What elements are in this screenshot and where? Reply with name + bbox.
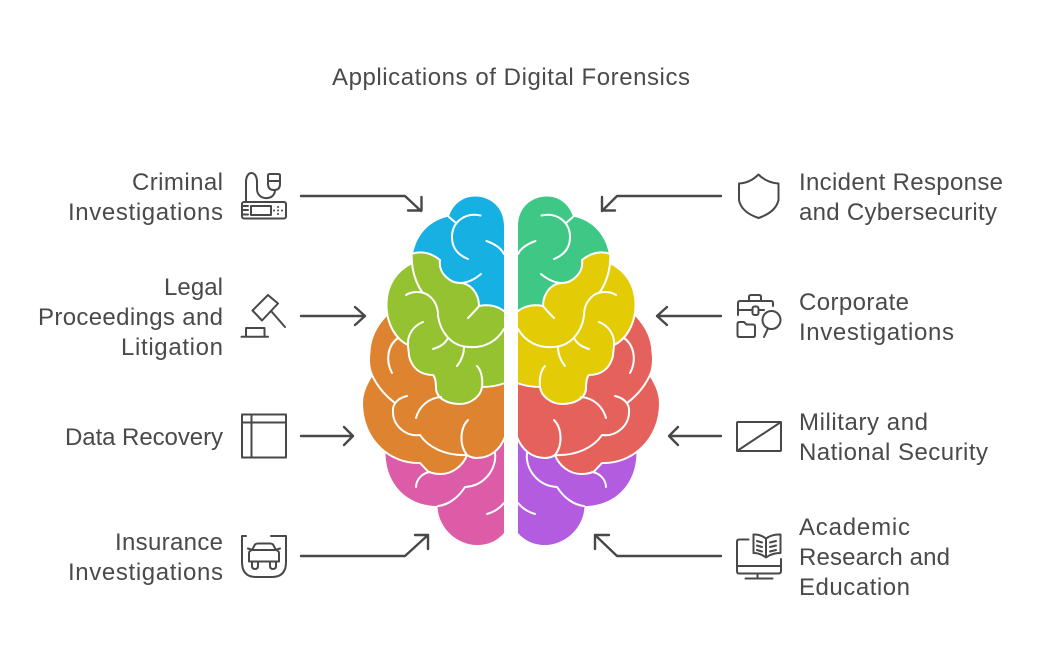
label: Insurance Investigations: Investigations [68,559,223,586]
lobe: green [386,252,505,404]
lobe: pink [386,430,504,545]
label: Incident Response and Cybersecurity [799,169,1003,226]
label: Incident Response and Cybersecurity: and Cybersecurity [799,199,997,226]
lobe folds [518,215,650,514]
lobe: yellow [517,252,636,404]
label: Academic Research and Education: Academic [799,514,910,541]
lobe: purple [518,430,636,545]
label: Legal Proceedings and Litigation [38,274,223,361]
label: Legal Proceedings and Litigation: Litigation [121,334,223,361]
label: Criminal Investigations: Investigations [68,199,223,226]
arrow: legal to brain [301,307,365,325]
brain: left hemisphere [362,196,505,545]
label: Insurance Investigations [68,529,223,586]
icon: book on monitor [737,534,781,578]
label: Corporate Investigations [799,289,954,346]
label: Corporate Investigations: Corporate [799,289,909,316]
label: Military and National Security [799,409,988,466]
lobe: orange [362,315,505,474]
label: Legal Proceedings and Litigation: Proceedings and [38,304,223,331]
title: Applications of Digital Forensics [332,64,690,91]
label: Academic Research and Education: Education [799,574,910,601]
arrow: insurance to brain [301,535,428,556]
label: Data Recovery: Data Recovery [65,424,223,451]
lobe folds [372,215,504,514]
icon: gavel [242,295,285,337]
arrow: data recovery to brain [301,427,353,445]
lobe: red [517,315,660,474]
label: Academic Research and Education: Research and [799,544,950,571]
label: Criminal Investigations: Criminal [132,169,223,196]
arrow: academic to brain [595,535,721,556]
icon: car in shield [242,536,286,577]
label: Academic Research and Education [799,514,950,601]
label: Corporate Investigations: Investigations [799,319,954,346]
arrow: corporate to brain [657,307,721,325]
lobe: blue [413,196,504,320]
icon: briefcase, folder and magnifier [738,295,780,337]
label: Criminal Investigations [68,169,223,226]
label: Legal Proceedings and Litigation: Legal [164,274,223,301]
label: Military and National Security: Military and [799,409,928,436]
arrow: criminal to brain [301,196,422,211]
lobe: teal [518,196,609,320]
icon: shield [739,174,778,218]
arrow: military to brain [669,427,721,445]
arrow: incident to brain [602,196,721,211]
icon: radio [242,173,286,218]
label: Insurance Investigations: Insurance [115,529,223,556]
label: Military and National Security: National Security [799,439,988,466]
label: Incident Response and Cybersecurity: Incident Response [799,169,1003,196]
icon: table [242,414,286,458]
brain: right hemisphere [517,196,660,545]
icon: rectangle with diagonal [737,422,781,451]
